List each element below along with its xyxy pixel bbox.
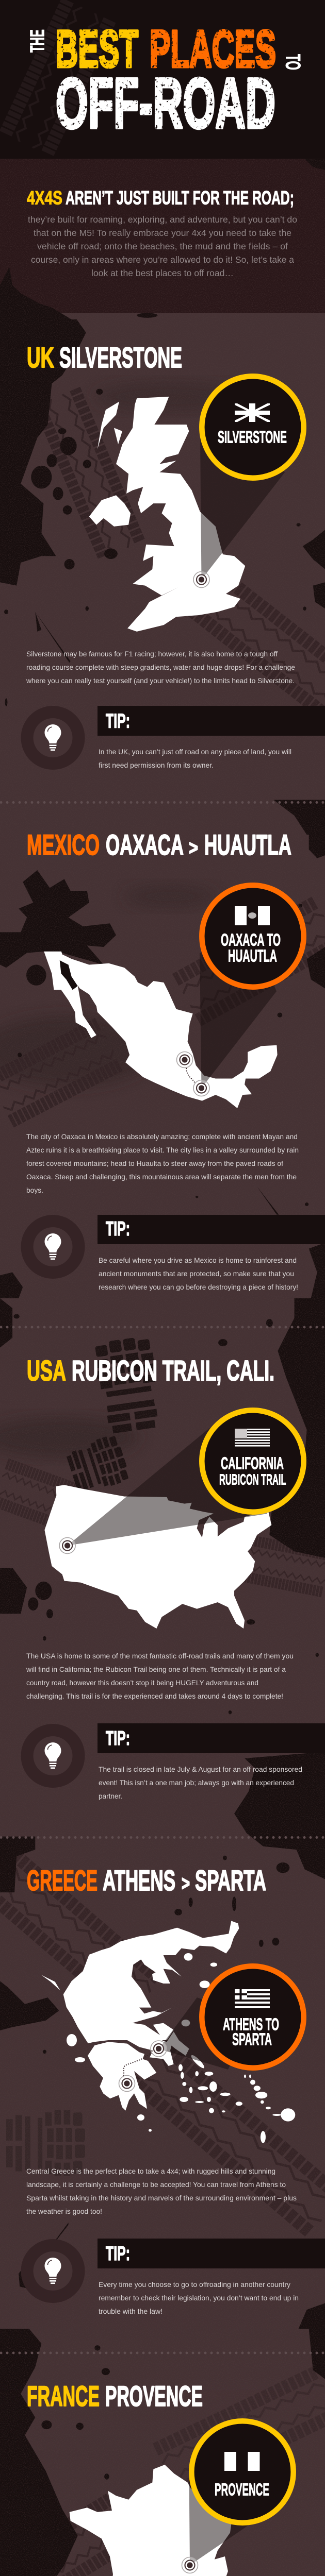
- icon: Mexico flag: [235, 906, 270, 925]
- body text: Mexico: Aztec ruins it is a breathtaking place to visit. The city lies in a valley surrounded by rain: [26, 1146, 299, 1154]
- tip banner: [98, 2239, 325, 2268]
- heading: UK Silverstone: SILVERSTONE: [59, 341, 182, 374]
- icon: light bulb: [21, 2239, 85, 2303]
- marker: Rubicon Trail: [59, 1537, 75, 1554]
- icon: Greece flag: [235, 1989, 270, 2008]
- tip text: ancient monuments that are protected, so make sure that you: [99, 1269, 294, 1278]
- body text: UK: [26, 650, 295, 685]
- body text: USA: will find in California; the Rubicon Trail being one of them. Technically it is part of a: [26, 1665, 286, 1673]
- icon: France flag: [224, 2452, 260, 2471]
- icon: USA flag: [235, 1429, 270, 1447]
- tip banner: [98, 1723, 325, 1753]
- heading: Greece: ATHENS: [103, 1864, 175, 1896]
- body text: Mexico: Oaxaca. Steep and challenging, this mountainous area will separate the men from the: [26, 1173, 297, 1181]
- body text: Mexico: [26, 1132, 299, 1194]
- panel: Mexico: [21, 828, 325, 1291]
- intro text: that on the M5! To really embrace your 4x4 you need to take the: [34, 228, 291, 238]
- tip text: In the UK, you can’t just off road on any piece of land, you will: [99, 748, 291, 756]
- badge: Athens to Sparta: ATHENS TO: [223, 2014, 279, 2034]
- marker: Athens: [151, 2041, 167, 2057]
- tip: Mexico: [21, 1215, 325, 1291]
- tip text: [99, 748, 291, 769]
- marker: Provence: [182, 2557, 198, 2573]
- icon: light bulb: [21, 1215, 85, 1279]
- tip text: Every time you choose to go to offroading in another country: [99, 2280, 290, 2289]
- badge: Provence: PROVENCE: [215, 2480, 269, 2499]
- callout beam: [159, 1997, 253, 2070]
- panel: USA: [21, 1354, 325, 1800]
- panel: UK Silverstone: [21, 341, 325, 770]
- dotted separators: [1, 803, 325, 2576]
- body text: UK: where you can really test yourself (and your vehicle!) to the limits head to Silverstone.: [26, 676, 295, 685]
- heading: Mexico: >: [189, 837, 198, 859]
- body text: Greece: [26, 2167, 297, 2215]
- heading: USA: USA: [27, 1354, 66, 1387]
- map: USA: [44, 1485, 271, 1629]
- heading: Greece: [27, 1864, 266, 1896]
- tip text: remember to check their legislation, you don’t want to end up in: [99, 2294, 299, 2302]
- marker: Oaxaca: [193, 1080, 209, 1096]
- badge: Oaxaca to Huautla: OAXACA TO: [221, 930, 281, 949]
- tip: Greece: [21, 2239, 325, 2315]
- badge: Athens to Sparta: SPARTA: [232, 2030, 272, 2048]
- body text: Mexico: boys.: [26, 1186, 43, 1194]
- heading: Greece: SPARTA: [195, 1864, 266, 1896]
- zoom-5 mud: [0, 1814, 325, 2329]
- heading: Greece: GREECE: [27, 1864, 98, 1896]
- body text: Greece: Central Greece is the perfect place to take a 4x4; with rugged hills and stunning: [26, 2167, 275, 2175]
- icon: light bulb: [21, 1724, 85, 1788]
- heading: Greece: >: [182, 1872, 190, 1895]
- map: Greece: [41, 1921, 295, 2143]
- callout beam: [200, 427, 285, 580]
- heading: UK Silverstone: UK: [27, 341, 54, 374]
- tip banner: TIP:: [106, 2243, 130, 2265]
- intro text: they’re built for roaming, exploring, and adventure, but you can’t do: [28, 214, 297, 225]
- zoom-1 mud: [0, 159, 325, 319]
- heading: France: [27, 2380, 203, 2412]
- zoom-3 mud: [0, 835, 325, 1298]
- badge: California Rubicon Trail: [202, 1410, 304, 1512]
- tip text: event! This isn’t a one man job; always go with an experienced: [99, 1778, 294, 1787]
- panel: France: [21, 2380, 325, 2576]
- intro text: look at the best places to off road…: [91, 268, 234, 278]
- callout beam: [200, 936, 277, 1088]
- tip text: first need permission from its owner.: [99, 761, 214, 769]
- intro heading: 4X4S: [27, 188, 62, 208]
- tip banner: [98, 706, 325, 736]
- map: Mexico: [44, 952, 278, 1108]
- zoom-6 mud: [0, 2329, 325, 2576]
- body text: Mexico: The city of Oaxaca in Mexico is absolutely amazing; complete with ancient Mayan and: [26, 1132, 298, 1141]
- tip banner: [98, 1215, 325, 1244]
- tip banner: TIP:: [106, 710, 130, 733]
- map: France: [70, 2465, 239, 2576]
- tip: USA: [21, 1723, 325, 1800]
- callout beam: [189, 2472, 255, 2565]
- heading: Mexico: OAXACA: [106, 828, 184, 861]
- body text: USA: challenging. This trail is for the experienced and takes around 4 days to complete!: [26, 1692, 283, 1700]
- zoom-4 mud: [0, 1298, 325, 1814]
- body text: Greece: landscape, it is certainly a challenge to be accepted! You can travel from Athens to: [26, 2180, 286, 2189]
- heading: Mexico: MEXICO: [27, 828, 100, 861]
- icon: light bulb: [21, 706, 85, 770]
- callout beam: [68, 1428, 267, 1546]
- route: Athens to Sparta: [124, 2054, 150, 2076]
- tip: UK: [21, 706, 325, 770]
- badge: Oaxaca to Huautla: HUAUTLA: [228, 946, 277, 965]
- badge: Silverstone: [202, 376, 304, 478]
- intro text: course, only in areas where you’re allowed to do it! So, let’s take a: [31, 255, 294, 265]
- tip text: [99, 2280, 299, 2315]
- body text: UK: roading course complete with steep gradients, water and huge drops! For a challenge: [26, 663, 295, 671]
- body text: USA: The USA is home to some of the most fantastic off-road trails and many of them you: [26, 1652, 294, 1660]
- marker: Sparta: [119, 2075, 135, 2092]
- zoom-2 mud: [0, 319, 325, 835]
- badge: California Rubicon Trail: CALIFORNIA: [221, 1454, 284, 1472]
- title: THE: [27, 29, 48, 53]
- tip text: research where you can go before destroying a piece of history!: [99, 1283, 298, 1291]
- body text: USA: country road, however this doesn’t stop it being HUGELY adventurous and: [26, 1679, 258, 1687]
- badge: Athens to Sparta: [202, 1966, 304, 2068]
- route: Huautla to Oaxaca: [186, 1068, 195, 1083]
- tip text: [99, 1765, 302, 1800]
- heading: USA: [27, 1354, 274, 1387]
- body text: Greece: Sparta whilst taking in the history and marvels of the surrounding environment – plus: [26, 2194, 297, 2202]
- marker: Silverstone: [193, 572, 209, 587]
- tip text: trouble with the law!: [99, 2307, 163, 2315]
- heading: Mexico: [27, 828, 291, 861]
- panel: Greece: [21, 1864, 325, 2315]
- body text: Greece: the weather is good too!: [26, 2207, 102, 2215]
- map: United Kingdom: [89, 397, 245, 632]
- intro panel: [27, 188, 297, 278]
- tip text: Be careful where you drive as Mexico is home to rainforest and: [99, 1256, 297, 1264]
- intro text: [28, 214, 297, 278]
- tip text: The trail is closed in late July & August for an off road sponsored: [99, 1765, 302, 1773]
- marker: Huautla: [176, 1052, 193, 1067]
- title: [27, 20, 304, 143]
- badge: Provence: [191, 2421, 294, 2523]
- tip banner: TIP:: [106, 1727, 130, 1750]
- body text: UK: Silverstone may be famous for F1 racing; however, it is also home to a tough off: [26, 650, 278, 658]
- tip banner: TIP:: [106, 1218, 130, 1240]
- tip text: [99, 1256, 298, 1291]
- tip text: partner.: [99, 1792, 122, 1800]
- badge: Oaxaca to Huautla: [202, 885, 304, 987]
- title: BEST: [56, 20, 138, 78]
- heading: UK Silverstone: [27, 341, 182, 374]
- title: TO: [282, 54, 304, 70]
- body text: Mexico: forest covered mountains; head to Huaulta to steer away from the paved roads of: [26, 1159, 283, 1167]
- intro text: vehicle off road; onto the beaches, the mud and the fields – of: [37, 241, 288, 251]
- heading: France: FRANCE: [27, 2380, 100, 2412]
- body text: USA: [26, 1652, 294, 1700]
- heading: France: PROVENCE: [105, 2380, 203, 2412]
- icon: UK flag: [235, 403, 270, 422]
